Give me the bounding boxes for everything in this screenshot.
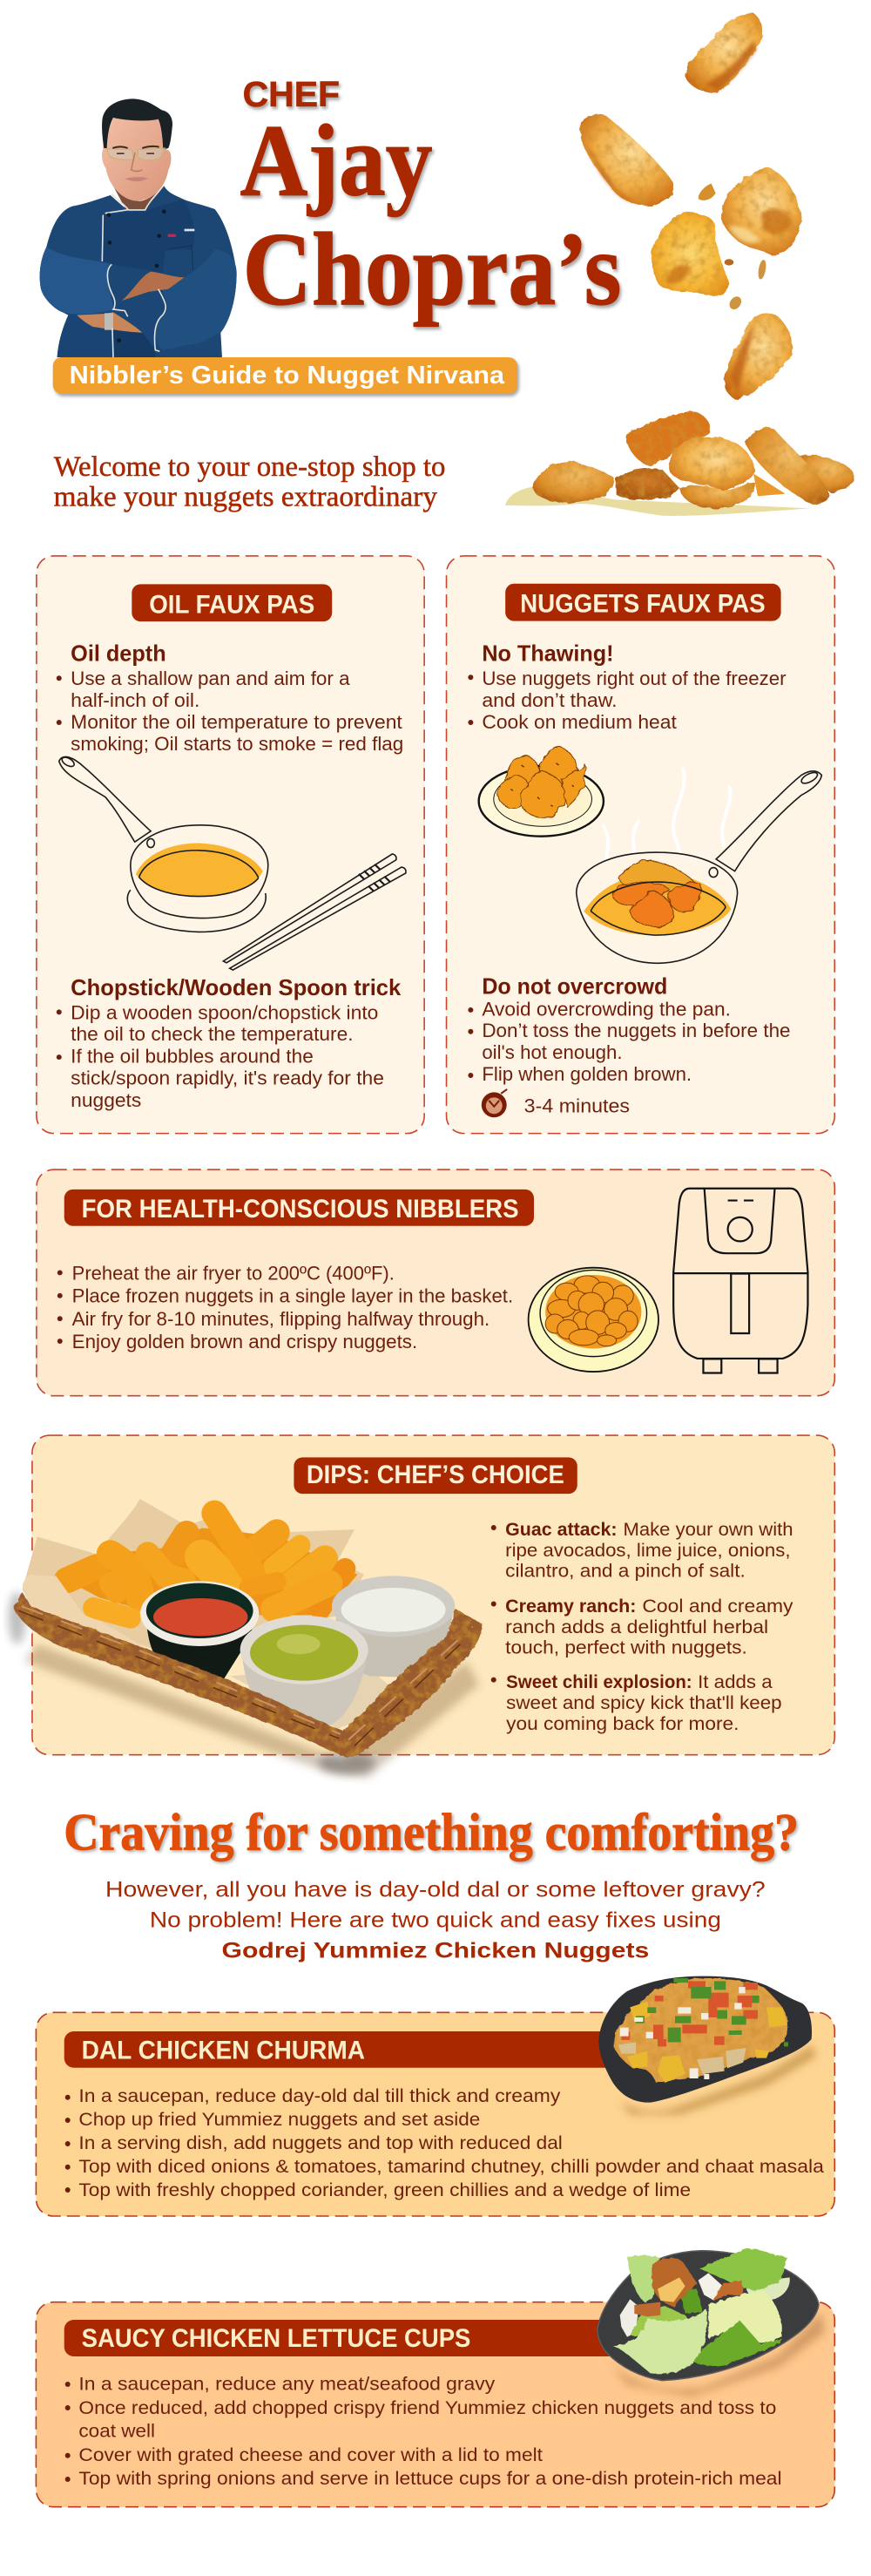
list: overcrowding tips: Avoid overcrowding the pan. — [482, 998, 731, 1020]
list: air fryer steps: Air fry for 8-10 minutes, flipping halfway through. — [72, 1308, 490, 1330]
list: dip suggestions: Creamy ranch: — [505, 1596, 636, 1617]
subheading: do not overcrowd: Do not overcrowd — [482, 974, 667, 999]
illustration: pan with oil and chopsticks — [59, 756, 406, 970]
image: basket of fries with dips — [9, 1499, 482, 1778]
list: overcrowding tips — [468, 998, 791, 1085]
heading pill: saucy chicken lettuce cups — [64, 2320, 619, 2356]
list: dip suggestions: Guac attack: — [505, 1520, 618, 1540]
list: dip suggestions: touch, perfect with nuggets. — [505, 1638, 747, 1658]
list: dal chicken churma steps: In a saucepan, reduce day-old dal till thick and creamy — [78, 2086, 561, 2106]
list: chopstick tips: nuggets — [71, 1089, 141, 1111]
list: dip suggestions: cilantro, and a pinch of salt. — [505, 1562, 746, 1582]
illustration: plate of frozen nuggets — [479, 747, 604, 837]
photo: Chef Ajay Chopra — [40, 98, 237, 357]
image: lettuce cups plate — [598, 2248, 825, 2396]
list: thawing tips — [468, 668, 787, 733]
subtitle pill: Nibbler’s Guide to Nugget Nirvana — [70, 362, 505, 390]
panel: oil faux pas — [37, 556, 424, 1134]
heading pill: health-conscious nibblers: FOR HEALTH-CONSCIOUS NIBBLERS — [82, 1195, 519, 1224]
heading: craving for something comforting: Craving for something comforting? — [64, 1804, 799, 1861]
list: chopstick tips: If the oil bubbles around the — [71, 1046, 314, 1068]
panel: dal chicken churma — [36, 2012, 834, 2216]
list: lettuce cups steps: In a saucepan, reduce any meat/seafood gravy — [78, 2375, 496, 2395]
list: dal chicken churma steps: In a serving dish, add nuggets and top with reduced dal — [78, 2133, 563, 2153]
list: chopstick tips: the oil to check the temperature. — [71, 1023, 354, 1045]
list: chopstick tips: stick/spoon rapidly, it's ready for the — [71, 1067, 384, 1088]
image: falling nuggets — [581, 13, 801, 400]
intro paragraph — [105, 1878, 766, 1963]
header titles — [53, 74, 621, 513]
lower section — [36, 1804, 834, 2507]
list: lettuce cups steps — [65, 2375, 782, 2489]
image: dal chicken churma plate — [598, 1976, 816, 2115]
list: dip suggestions — [491, 1520, 793, 1734]
list: dip suggestions: Sweet chili explosion: — [506, 1672, 692, 1692]
list: dal chicken churma steps: Top with diced onions & tomatoes, tamarind chutney, chilli powder and chaat masala — [78, 2157, 824, 2177]
panel: dips — [32, 1435, 834, 1755]
list: lettuce cups steps: coat well — [78, 2422, 155, 2442]
subtitle pill — [53, 357, 517, 394]
list: dip suggestions: Make your own with — [624, 1520, 793, 1540]
list: thawing tips: Use nuggets right out of the freezer — [482, 668, 787, 689]
list: oil depth tips — [57, 668, 403, 755]
intro paragraph: No problem! Here are two quick and easy fixes using — [150, 1908, 721, 1933]
intro text — [54, 451, 445, 513]
heading pill: dal chicken churma: DAL CHICKEN CHURMA — [82, 2037, 365, 2065]
list: overcrowding tips: oil's hot enough. — [482, 1041, 623, 1063]
list: dip suggestions: Cool and creamy — [642, 1596, 793, 1617]
list: air fryer steps: Place frozen nuggets in a single layer in the basket. — [72, 1285, 513, 1306]
illustration: air fryer — [673, 1189, 807, 1373]
list: oil depth tips: Monitor the oil temperature to prevent — [71, 711, 402, 733]
panels row — [37, 556, 834, 1134]
panels: health and dips — [32, 1169, 834, 1755]
list: dip suggestions: you coming back for more. — [506, 1714, 739, 1734]
list: dal chicken churma steps: Chop up fried Yummiez nuggets and set aside — [78, 2110, 480, 2130]
heading: CHEF: CHEF — [243, 74, 340, 114]
list: air fryer steps: Enjoy golden brown and crispy nuggets. — [72, 1331, 417, 1352]
list: dal chicken churma steps: Top with freshly chopped coriander, green chillies and a wedge of lime — [78, 2180, 691, 2200]
heading: Ajay: Ajay — [240, 104, 433, 217]
heading pill: dips: DIPS: CHEF’S CHOICE — [307, 1461, 564, 1489]
list: lettuce cups steps: Cover with grated cheese and cover with a lid to melt — [78, 2445, 543, 2465]
heading pill: dal chicken churma — [64, 2031, 619, 2068]
intro text: make your nuggets extraordinary — [54, 482, 438, 513]
heading pill: saucy chicken lettuce cups: SAUCY CHICKEN LETTUCE CUPS — [82, 2324, 470, 2353]
list: thawing tips: and don’t thaw. — [482, 689, 618, 711]
list: overcrowding tips: Flip when golden brown. — [482, 1063, 692, 1085]
illustration: pan frying nuggets with steam — [577, 769, 821, 963]
list: thawing tips: Cook on medium heat — [482, 711, 677, 733]
subheading: chopstick trick: Chopstick/Wooden Spoon trick — [71, 976, 402, 1000]
list: lettuce cups steps: Top with spring onions and serve in lettuce cups for a one-dish protein-rich meal — [78, 2469, 782, 2489]
heading pill: oil faux pas — [132, 584, 332, 621]
cooking time: 3-4 minutes — [524, 1095, 630, 1117]
list: dal chicken churma steps — [65, 2086, 824, 2200]
intro paragraph: Godrej Yummiez Chicken Nuggets — [222, 1939, 649, 1963]
list: oil depth tips: half-inch of oil. — [71, 689, 199, 711]
list: dip suggestions: sweet and spicy kick that'll keep — [506, 1693, 782, 1713]
list: overcrowding tips: Don’t toss the nuggets in before the — [482, 1020, 791, 1041]
illustration: bowl of nuggets — [529, 1268, 658, 1372]
icon: timer — [482, 1089, 507, 1117]
subheading: oil depth: Oil depth — [71, 641, 166, 666]
panel: health-conscious nibblers — [37, 1169, 834, 1396]
list: dip suggestions: It adds a — [698, 1672, 773, 1692]
list: chopstick tips: Dip a wooden spoon/chopstick into — [71, 1001, 378, 1023]
list: chopstick tips — [57, 1001, 384, 1111]
intro text: Welcome to your one-stop shop to — [54, 451, 445, 483]
list: dip suggestions: ranch adds a delightful herbal — [505, 1617, 768, 1637]
intro paragraph: However, all you have is day-old dal or some leftover gravy? — [105, 1878, 766, 1902]
panel: nuggets faux pas — [447, 556, 834, 1134]
image: nugget pile — [505, 411, 854, 516]
list: air fryer steps — [57, 1262, 513, 1352]
list: lettuce cups steps: Once reduced, add chopped crispy friend Yummiez chicken nuggets and toss to — [78, 2398, 776, 2418]
list: dip suggestions: ripe avocados, lime juice, onions, — [505, 1541, 791, 1561]
list: oil depth tips: Use a shallow pan and aim for a — [71, 668, 350, 689]
list: oil depth tips: smoking; Oil starts to smoke = red flag — [71, 733, 403, 755]
panel: saucy chicken lettuce cups — [36, 2302, 834, 2507]
heading pill: oil faux pas: OIL FAUX PAS — [149, 591, 314, 620]
subheading: no thawing: No Thawing! — [482, 641, 614, 666]
list: air fryer steps: Preheat the air fryer to 200ºC (400ºF). — [72, 1262, 395, 1284]
heading: Chopra's: Chopra’s — [243, 212, 621, 327]
heading pill: nuggets faux pas: NUGGETS FAUX PAS — [520, 590, 766, 619]
